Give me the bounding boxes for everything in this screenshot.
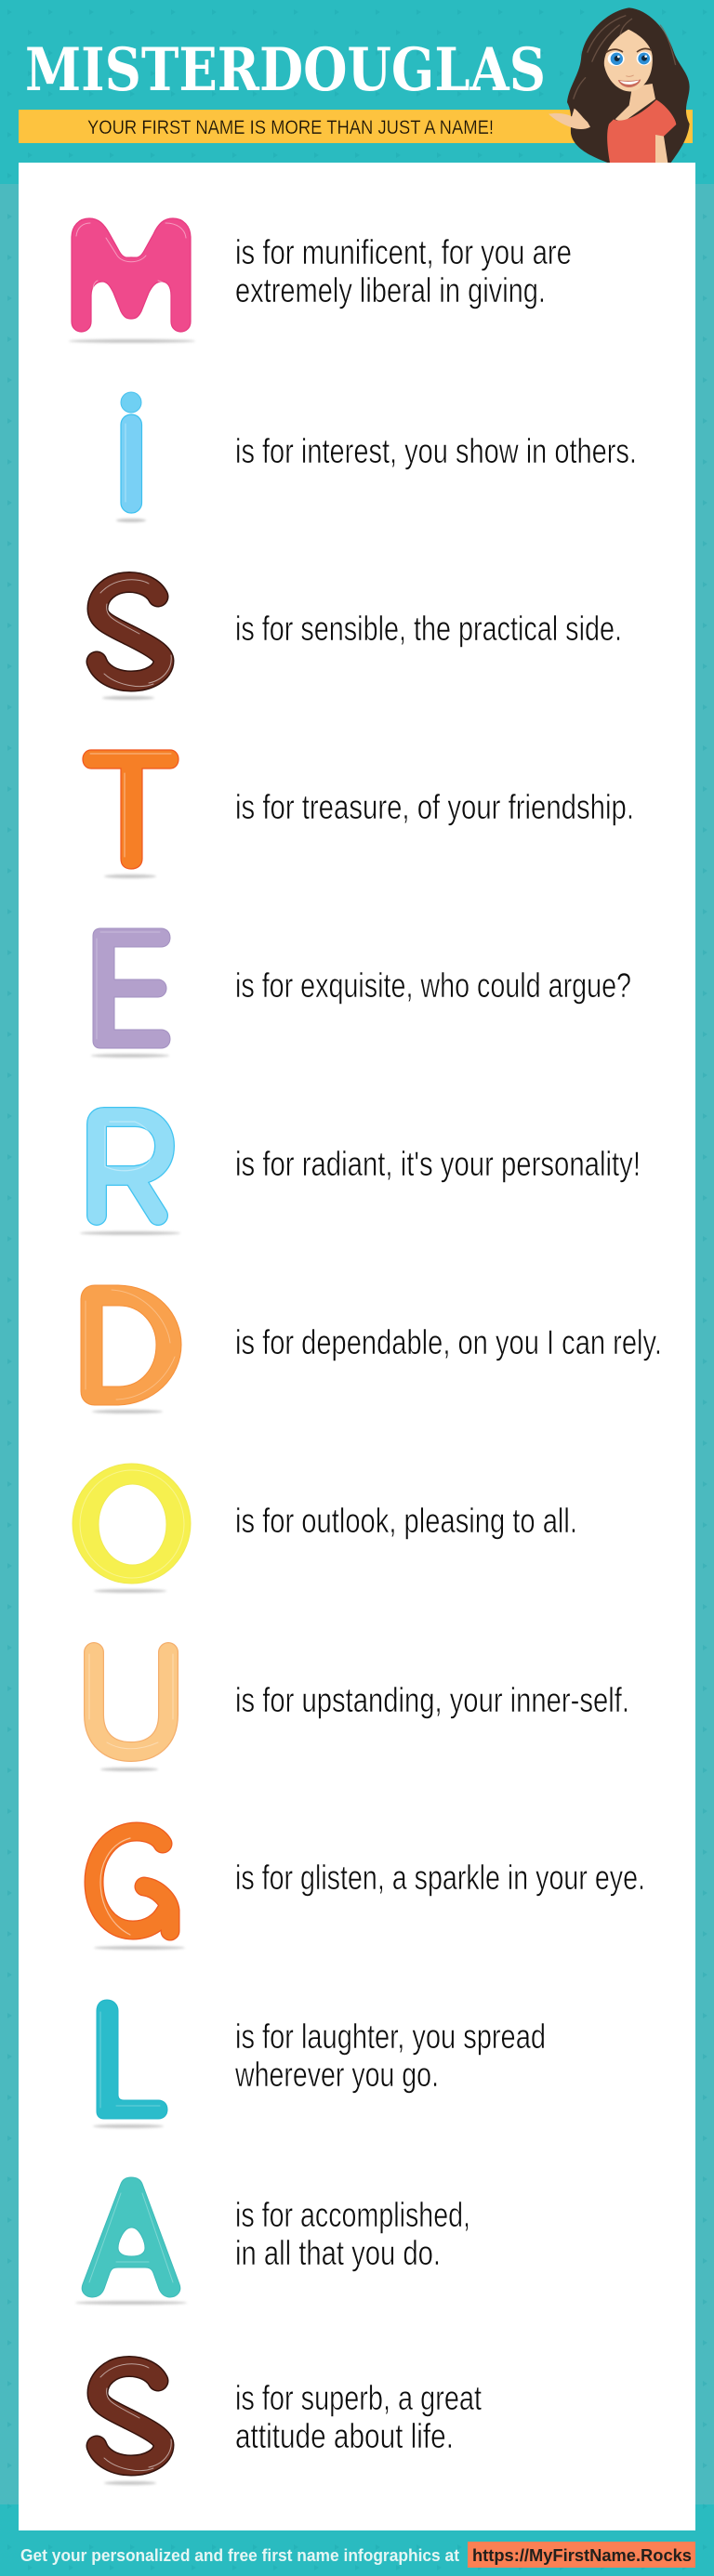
letter I: [116, 392, 146, 522]
text: [235, 233, 572, 309]
text: is for accomplished,: [235, 2196, 470, 2234]
row: M: [69, 218, 572, 343]
text: [234, 2017, 546, 2094]
letter D: [81, 1285, 181, 1413]
letter O: [73, 1464, 191, 1593]
letter U: [89, 1652, 173, 1771]
text: attitude about life.: [235, 2417, 454, 2455]
text: wherever you go.: [234, 2056, 439, 2094]
character: smiling woman: [549, 7, 690, 163]
letter M: [69, 218, 195, 343]
letter S: [97, 2364, 171, 2485]
row: L: [93, 2000, 546, 2128]
row: S: [97, 580, 622, 700]
row: O: [73, 1464, 577, 1593]
text: is for laughter, you spread: [235, 2017, 546, 2056]
text: is for munificent, for you are: [235, 233, 572, 271]
text: [235, 2196, 470, 2272]
letter L: [93, 2000, 167, 2128]
text: is for superb, a great: [235, 2379, 483, 2417]
row: R: [80, 1117, 641, 1235]
text: is for outlook, pleasing to all.: [235, 1502, 577, 1540]
url badge: [468, 2542, 695, 2568]
footer text: Get your personalized and free first name infographics at: [20, 2546, 459, 2565]
letter A: [75, 2177, 187, 2305]
footer: [20, 2542, 695, 2568]
url badge: https://MyFirstName.Rocks: [472, 2546, 692, 2565]
row: D: [81, 1285, 662, 1413]
row: E: [91, 928, 631, 1058]
banner: [19, 110, 693, 143]
letter E: [91, 928, 170, 1058]
text: [235, 2379, 483, 2455]
row: U: [89, 1652, 629, 1771]
row: A: [75, 2177, 470, 2305]
row: I: [116, 392, 637, 522]
row: S (second): [97, 2364, 483, 2485]
text: extremely liberal in giving.: [235, 271, 546, 309]
letter G: [94, 1832, 185, 1950]
row: G: [94, 1832, 645, 1950]
title: MISTERDOUGLAS: [25, 35, 546, 105]
row: T: [83, 750, 634, 878]
letter R: [80, 1117, 180, 1235]
letter S: [97, 580, 171, 700]
banner text: YOUR FIRST NAME IS MORE THAN JUST A NAME!: [87, 117, 494, 138]
text: in all that you do.: [235, 2234, 441, 2272]
letter T: [83, 750, 178, 878]
